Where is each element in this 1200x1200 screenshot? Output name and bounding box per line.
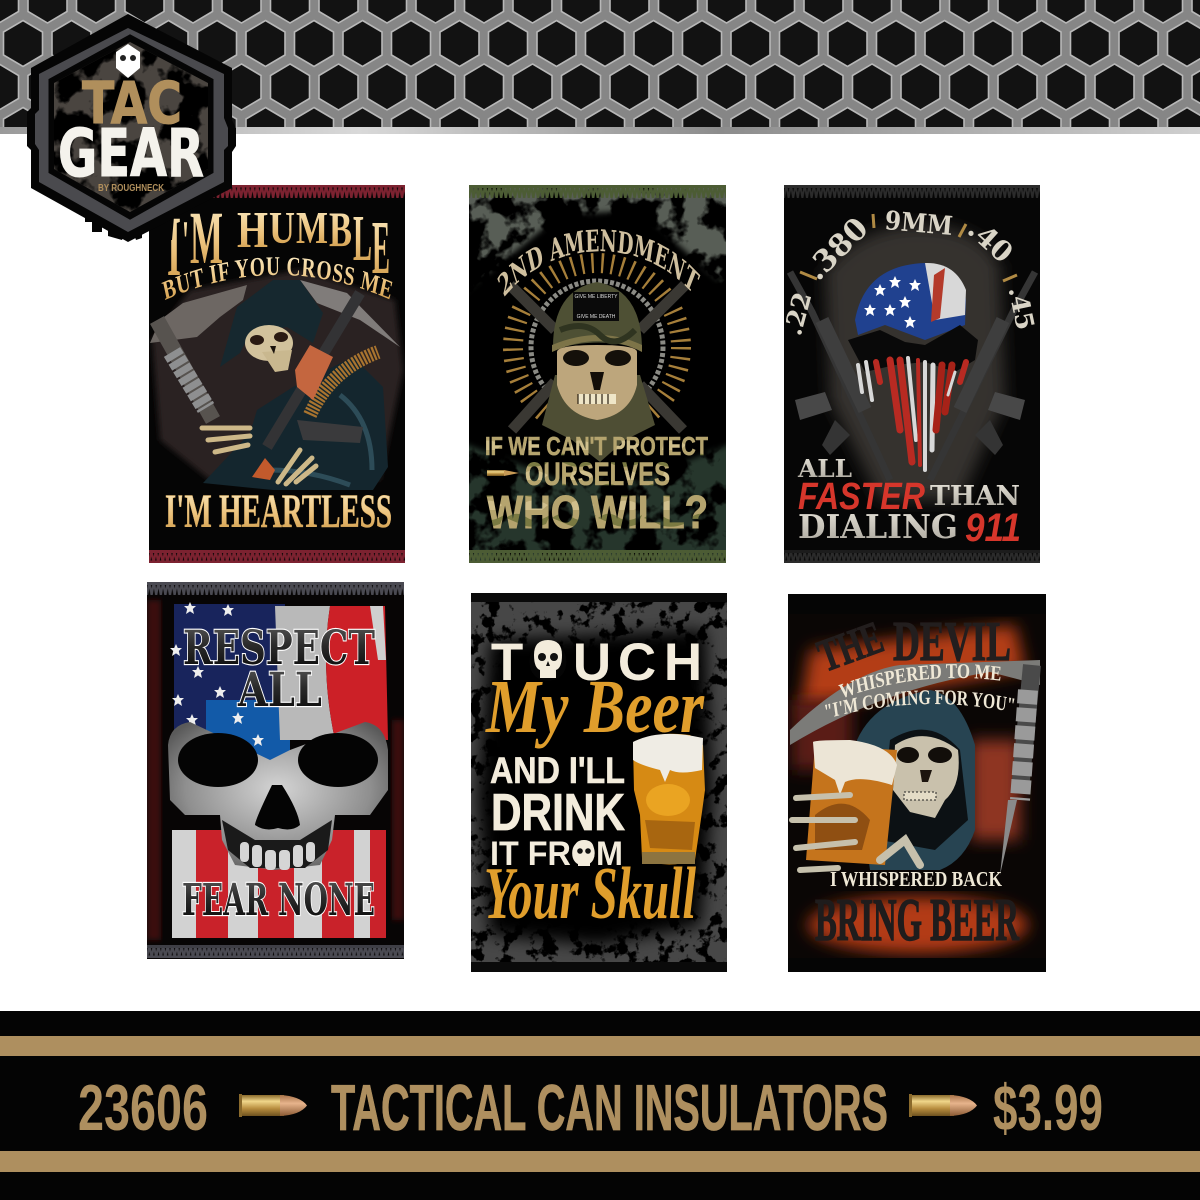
item number: 23606 [78, 1071, 208, 1144]
small bullet [487, 470, 519, 476]
tan stripe top [0, 1036, 1200, 1056]
word touch: U [573, 633, 611, 692]
radial bullets [513, 263, 681, 431]
black stitched trims [788, 594, 1046, 972]
poster: I'm humble reaper: E [372, 206, 390, 290]
black centre shadow [455, 210, 740, 480]
line all: ALL [797, 454, 852, 483]
logo grunge texture [50, 40, 212, 215]
headline I'm humble: M [190, 197, 223, 280]
logo skull emblem [116, 44, 140, 78]
silver skull [168, 722, 388, 870]
headline I'm heartless: I'M HEARTLESS [165, 485, 392, 538]
logo grey ring [35, 28, 228, 232]
punisher skull eyes and drips [848, 325, 978, 470]
camouflage cap [552, 282, 642, 352]
dark stitched trim bottom [784, 550, 1040, 563]
line who will: WHO WILL? [487, 486, 708, 538]
headline bring beer: BRING BEER [815, 887, 1019, 953]
green stitched trim top [469, 185, 726, 198]
line I'm coming for you: "I'M COMING FOR YOU" [825, 690, 1014, 717]
headline I'm humble [168, 213, 389, 275]
word touch: C [618, 633, 656, 692]
maroon stitched trim top [213, 185, 405, 198]
skull O in touch [534, 640, 562, 678]
line 911: 911 [965, 506, 1021, 550]
logo word gear: GEAR [58, 115, 204, 192]
line faster: FASTER [798, 476, 925, 518]
word touch [491, 633, 702, 692]
headline I'm humble: B [329, 201, 352, 257]
grey stitched trim bottom [147, 945, 404, 958]
reaper hood [220, 280, 323, 367]
orange glow bottom [808, 897, 1028, 953]
punisher skull flag dome [855, 263, 966, 340]
logo word tac: TAC [82, 69, 182, 137]
flag lower stripes [172, 830, 386, 938]
skull O in from [574, 840, 594, 866]
calibre arc labels [786, 210, 1035, 335]
reaper robe [203, 357, 388, 490]
logo teeth [85, 205, 175, 240]
headline I'm humble: H [237, 202, 268, 259]
green stitched trim bottom [469, 550, 726, 563]
orange glow top [800, 625, 1025, 710]
tiny bullets [800, 214, 1017, 281]
headline 2nd amendment: 2ND AMENDMENT [497, 229, 700, 296]
headline the: THE [811, 611, 890, 681]
line I whispered back: I WHISPERED BACK [830, 867, 1003, 891]
calibre arc labels: .380 [799, 211, 875, 287]
poster: respect all fear none [147, 582, 404, 959]
header metal mesh band [0, 0, 1200, 134]
maroon stitched trim bottom [149, 550, 405, 563]
grim skull [893, 736, 959, 818]
line drink: DRINK [491, 784, 625, 842]
line it from: IT FROM [490, 835, 623, 873]
headline devil: DEVIL [893, 611, 1011, 673]
cap patch: GIVE ME DEATH [577, 314, 616, 320]
headline fear none: FEAR NONE [182, 875, 375, 926]
black stitched trims [471, 593, 727, 972]
bullet icon left [239, 1094, 307, 1117]
headline respect: RESPECT [183, 621, 375, 676]
bullet icon right [909, 1094, 977, 1117]
skull scarf [542, 375, 655, 462]
cap patch [573, 292, 619, 321]
headline I'm humble: M [296, 202, 328, 253]
skull beer mug [633, 734, 705, 865]
headline I'm humble: U [269, 202, 295, 253]
dark hood interior [880, 730, 968, 850]
soldier skull [557, 345, 637, 420]
price: $3.99 [993, 1071, 1103, 1144]
bar blurred background [792, 700, 1020, 840]
logo byline: BY ROUGHNECK [98, 183, 165, 194]
word touch: O [527, 633, 569, 692]
beer glass [806, 740, 897, 865]
scythe blade [790, 660, 1040, 745]
Tac Gear hexagon logo [27, 14, 236, 242]
headline I'm humble: I [167, 198, 181, 294]
calibre arc labels: 9MM [884, 206, 954, 242]
flag upper [170, 602, 388, 765]
poster: 2nd amendment [469, 185, 726, 563]
dark stitched trim top [784, 185, 1040, 198]
logo outer hexagon [27, 14, 236, 242]
skeleton hand [792, 795, 920, 870]
line ourselves: OURSELVES [525, 456, 670, 492]
line and I'll: AND I'LL [490, 750, 625, 791]
calibre arc labels: .22 [778, 289, 817, 339]
script your skull: Your Skull [484, 853, 696, 935]
poster: faster than dialing 911 [778, 185, 1040, 563]
black splatter centre [478, 630, 712, 945]
poster: I'm humble reaper [149, 185, 405, 563]
word touch: T [491, 633, 523, 692]
scythe handle [1000, 665, 1032, 875]
footer banner [0, 1011, 1200, 1200]
line whispered to me: WHISPERED TO ME [838, 664, 1000, 698]
calibre arc labels: .45 [1003, 284, 1040, 333]
stone background [152, 270, 403, 480]
line than: THAN [930, 481, 1020, 512]
headline I'm humble: L [353, 202, 372, 275]
crossed rifles [790, 272, 1035, 480]
calibre arc labels: .40 [961, 212, 1019, 270]
grey stitched trim top [147, 582, 404, 595]
poster: touch my beer [471, 593, 727, 972]
crossed rifles [510, 285, 685, 430]
poster: the devil bring beer [788, 594, 1046, 972]
rifle [252, 293, 363, 480]
ammo belt [310, 352, 378, 415]
reaper skull [245, 325, 293, 372]
hood [857, 690, 975, 870]
cap patch: GIVE ME LIBERTY [575, 294, 618, 300]
script my beer: My Beer [485, 665, 705, 749]
line dialing: DIALING [798, 507, 958, 546]
headline I'm humble: ' [182, 209, 189, 275]
grey flag cloth [825, 225, 1005, 500]
tan stripe bottom [0, 1151, 1200, 1172]
subhead but if you cross me: BUT IF YOU CROSS ME [162, 257, 392, 300]
word touch: H [664, 633, 702, 692]
scythe [150, 280, 400, 420]
logo inner panel [50, 36, 212, 218]
line if we can't protect: IF WE CAN'T PROTECT [485, 431, 708, 461]
headline all: ALL [237, 663, 322, 718]
bony hands [202, 428, 316, 484]
